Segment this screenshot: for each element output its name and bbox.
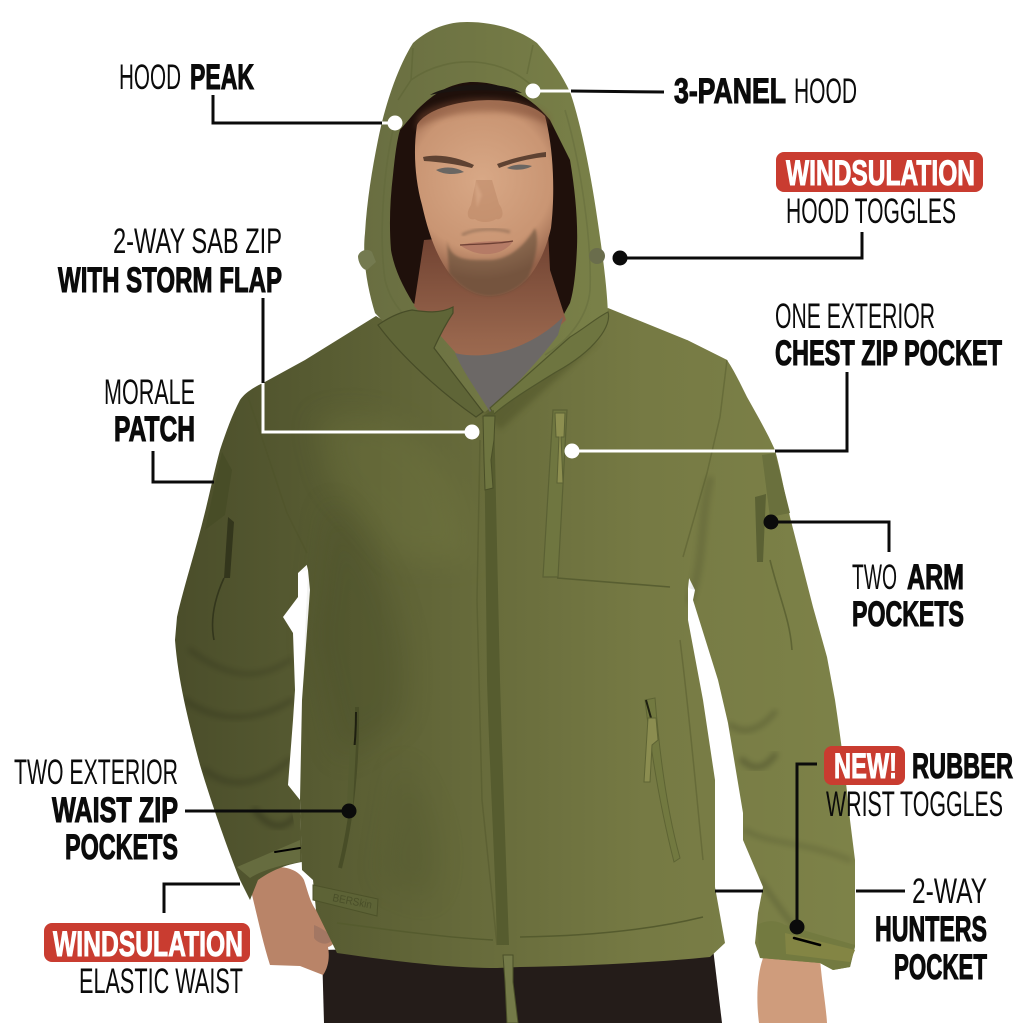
right hand [757, 958, 827, 1023]
label: hood peak [119, 58, 402, 130]
label: rubber wrist toggles: NEW! [834, 747, 897, 786]
label: windsulation elastic waist: WINDSULATION [53, 925, 243, 964]
hood interior [390, 82, 577, 350]
mouth [460, 241, 513, 254]
hood outer [364, 22, 608, 412]
label: windsulation elastic waist: ELASTIC WAIST [79, 962, 243, 1001]
brows [423, 152, 546, 168]
right sleeve [680, 340, 855, 970]
left sleeve [175, 383, 312, 900]
left hand [250, 867, 336, 975]
grey shirt [455, 317, 563, 412]
label: two arm pockets: TWO [852, 558, 897, 597]
face [415, 100, 553, 296]
forehead shadow [415, 98, 550, 130]
label: waist zip pockets: WAIST ZIP [52, 791, 178, 830]
hood panel seams [398, 45, 540, 100]
label: windsulation elastic waist [44, 884, 250, 1001]
right arm pocket [755, 494, 792, 650]
waist logo tab: BERSkin [331, 892, 373, 912]
label: two arm pockets: POCKETS [852, 595, 964, 634]
collar [378, 307, 483, 417]
left waist pocket [340, 707, 357, 868]
label: 3-panel hood [526, 72, 857, 111]
hood toggles [358, 250, 376, 270]
arm patch [762, 453, 790, 517]
label: 3-panel hood: HOOD [794, 72, 857, 111]
waist hem [337, 917, 703, 940]
hair [430, 84, 522, 95]
label: hunters pocket: 2-WAY [912, 872, 987, 911]
thumb nail [314, 925, 332, 944]
body [263, 308, 727, 968]
shading [185, 340, 850, 930]
label: morale patch: PATCH [114, 410, 195, 449]
label: morale patch: MORALE [104, 373, 195, 412]
label: 2-way sab zip: 2-WAY SAB ZIP [113, 222, 282, 261]
label: morale patch [104, 373, 214, 482]
label: hood peak: PEAK [190, 58, 254, 97]
label: 2-way sab zip: WITH STORM FLAP [58, 261, 282, 300]
label: chest zip pocket [564, 297, 1002, 458]
label: waist zip pockets: POCKETS [65, 828, 178, 867]
label: 3-panel hood: 3-PANEL [674, 72, 786, 111]
label: windsulation hood toggles [612, 152, 983, 266]
waist logo tab [313, 885, 378, 916]
label: waist zip pockets: TWO EXTERIOR [14, 753, 178, 792]
zip pulls [483, 416, 518, 1023]
label: hunters pocket [715, 872, 987, 987]
right waist pocket [644, 698, 680, 862]
left arm patch and pocket [205, 452, 234, 640]
label: 2-way sab zip [58, 222, 480, 440]
jacket photo [175, 22, 855, 1023]
label: waist zip pockets [14, 753, 356, 867]
centre zip [484, 410, 509, 945]
neck [414, 230, 566, 410]
shoulder and sleeve seams [248, 360, 727, 945]
label: rubber wrist toggles [790, 746, 1013, 934]
label: hood peak: HOOD [119, 58, 181, 97]
nose [468, 180, 503, 222]
stubble [447, 228, 537, 296]
pants [322, 940, 722, 1023]
chest pocket [543, 410, 670, 587]
right cuff [757, 921, 855, 970]
label: two arm pockets [764, 514, 964, 634]
eyes [436, 165, 532, 174]
label: two arm pockets: ARM [907, 558, 964, 597]
hood rim shading [382, 110, 590, 355]
left cuff [237, 840, 300, 878]
